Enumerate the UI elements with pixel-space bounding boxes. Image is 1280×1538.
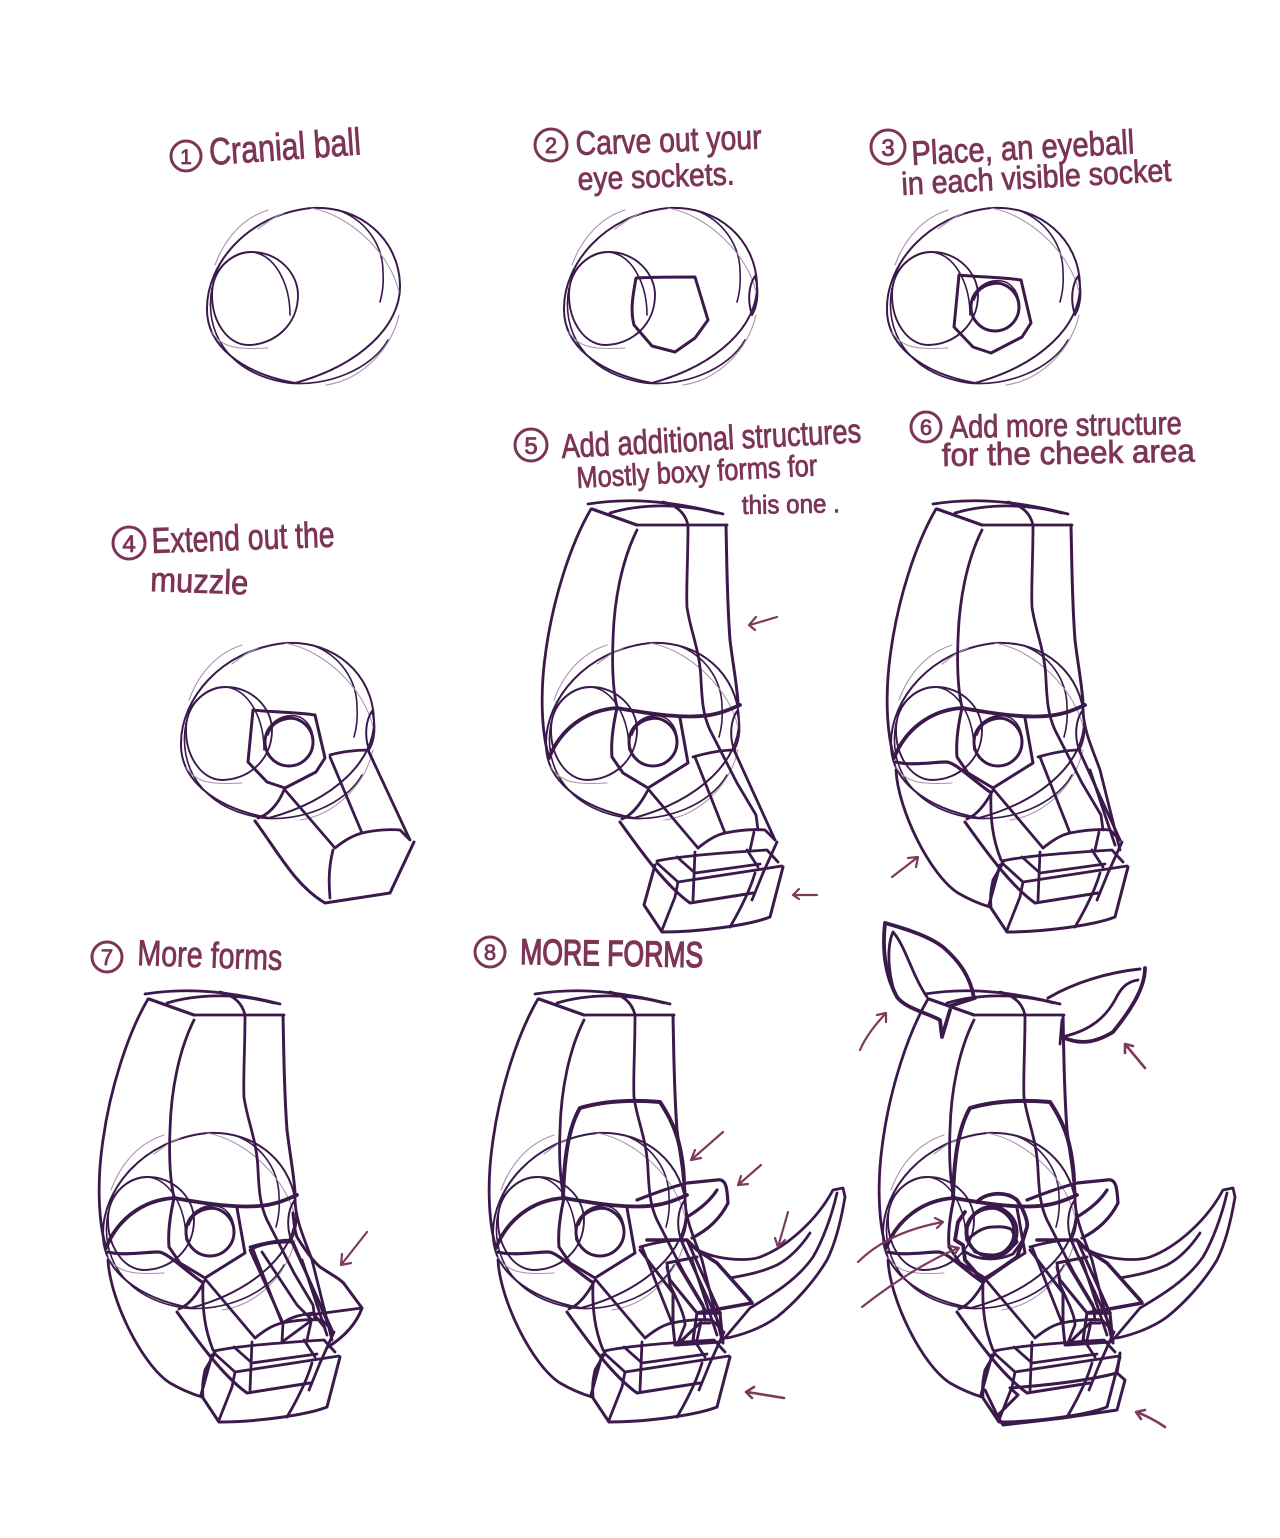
step 7 heading: more forms: 7 bbox=[101, 945, 113, 970]
step 8 heading: MORE FORMS: MORE FORMS bbox=[520, 931, 704, 975]
step 6 heading: cheek structure: for the cheek area bbox=[941, 433, 1195, 473]
ears bbox=[884, 923, 1145, 1044]
step 1 heading: cranial ball: Cranial ball bbox=[208, 121, 362, 174]
eyelid forms bbox=[955, 1194, 1027, 1281]
step 2 heading: carve eye sockets bbox=[535, 119, 762, 197]
arrow: brow box bbox=[749, 617, 777, 630]
step 4 heading: extend muzzle: muzzle bbox=[150, 561, 249, 602]
step 3 heading: place eyeball bbox=[871, 123, 1172, 202]
step 5 heading: additional structures: 5 bbox=[524, 433, 538, 460]
final arrows bbox=[858, 1013, 1165, 1427]
step 2 heading: carve eye sockets: 2 bbox=[545, 133, 557, 158]
step 2 heading: carve eye sockets: eye sockets. bbox=[577, 156, 735, 197]
step 2 drawing: ball with eye socket bbox=[564, 208, 757, 385]
step 1 drawing: cranial ball bbox=[207, 208, 400, 385]
step 8 arrows bbox=[691, 1132, 788, 1398]
step 3 heading: place eyeball: 3 bbox=[881, 135, 895, 162]
step 6 heading: cheek structure: 6 bbox=[920, 415, 932, 440]
step 1 heading: cranial ball bbox=[171, 121, 362, 174]
final drawing: head with ears, horns and eyelids bbox=[879, 923, 1235, 1425]
step 6 drawing: head with cheek forms bbox=[887, 501, 1128, 932]
step 4 heading: extend muzzle: Extend out the bbox=[151, 514, 335, 561]
step 5 heading: additional structures: Add additional structures bbox=[560, 412, 862, 466]
step 5 heading: additional structures: Mostly boxy forms for bbox=[576, 449, 818, 495]
arrow: cheek bbox=[892, 857, 918, 877]
arrow: nose bbox=[341, 1232, 367, 1265]
step 8 drawing: head with horns bbox=[489, 991, 845, 1422]
step 1 heading: cranial ball: 1 bbox=[180, 146, 192, 169]
arrow: snout box bbox=[793, 889, 817, 899]
step 8 heading: MORE FORMS bbox=[475, 931, 704, 975]
step 2 heading: carve eye sockets: Carve out your bbox=[575, 119, 762, 163]
step 5 drawing: head with box forms bbox=[542, 501, 783, 932]
step 7 drawing: head with nose forms bbox=[99, 991, 362, 1422]
step 7 heading: more forms bbox=[92, 932, 283, 978]
step 3 heading: place eyeball: Place, an eyeball bbox=[910, 123, 1135, 173]
step 4 heading: extend muzzle: 4 bbox=[122, 531, 136, 558]
step 4 drawing: ball with muzzle bbox=[181, 643, 414, 903]
lower lip box bbox=[985, 1353, 1125, 1425]
step 3 drawing: ball with socket and eyeball bbox=[887, 208, 1080, 385]
step 3 heading: place eyeball: in each visible socket bbox=[900, 152, 1172, 202]
step 6 heading: cheek structure: Add more structure bbox=[949, 405, 1182, 445]
step 4 heading: extend muzzle bbox=[113, 514, 335, 602]
step 7 heading: more forms: More forms bbox=[137, 932, 283, 978]
step 5 heading: additional structures: this one . bbox=[742, 488, 840, 520]
step 8 heading: MORE FORMS: 8 bbox=[484, 940, 496, 965]
step 5 heading: additional structures bbox=[515, 412, 862, 520]
step 6 heading: cheek structure bbox=[911, 405, 1195, 473]
